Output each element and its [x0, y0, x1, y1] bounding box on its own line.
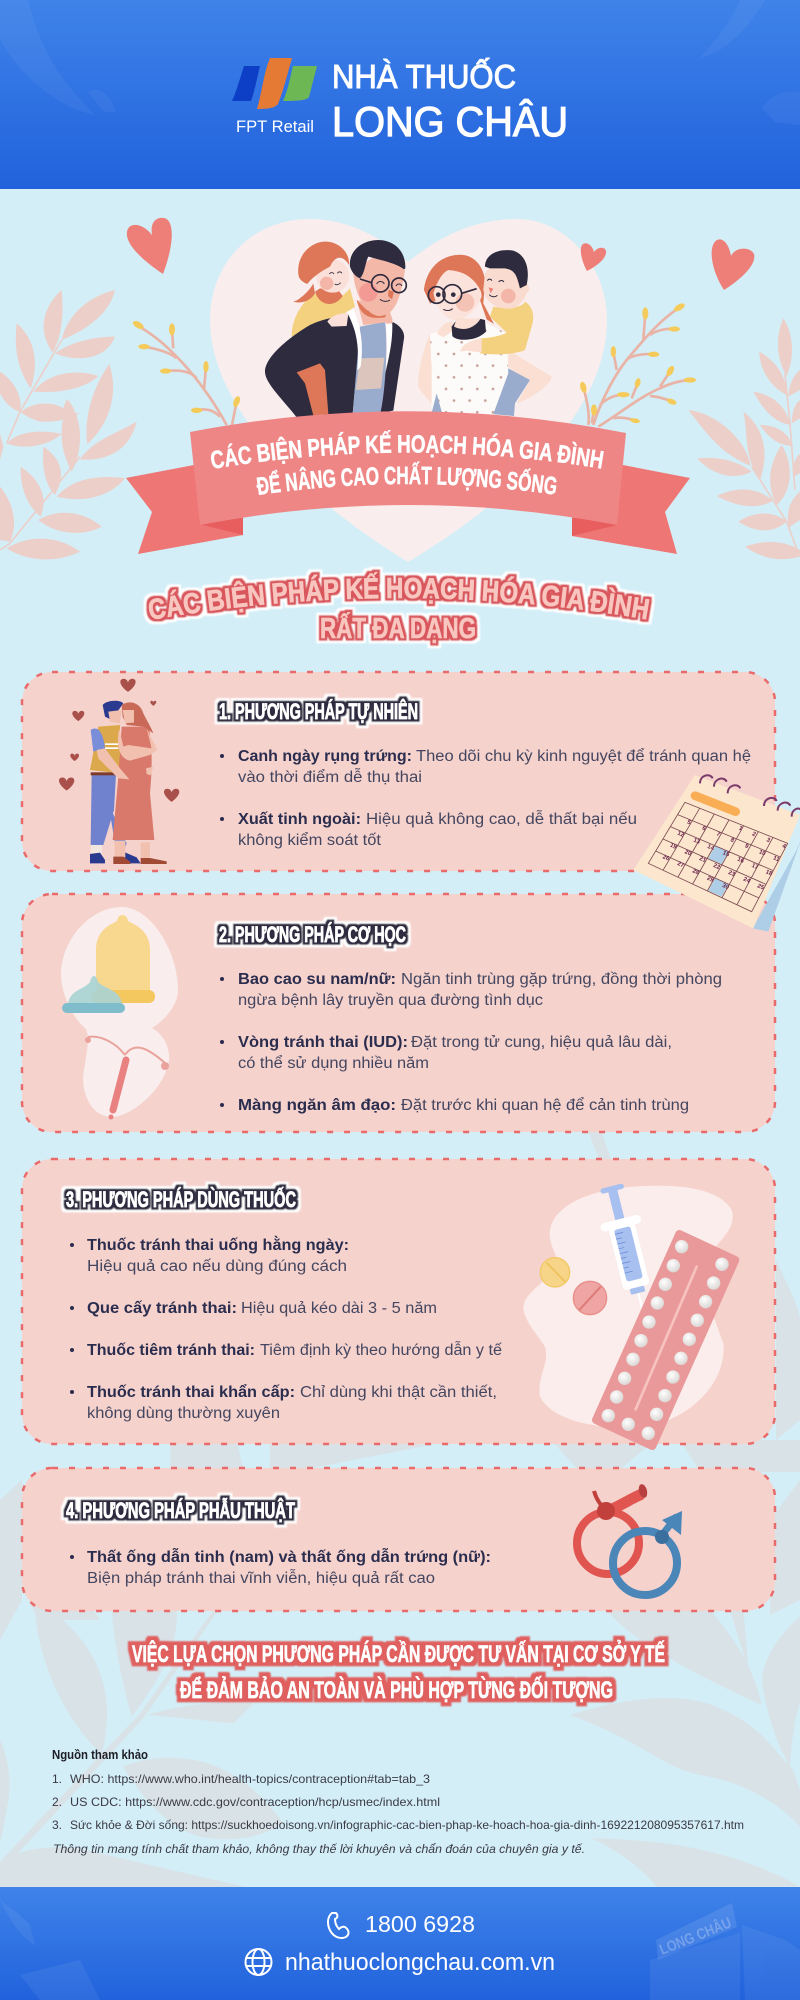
- logo: FPT Retail: [232, 58, 317, 136]
- ribbon text: ĐỂ NÂNG CAO CHẤT LƯỢNG SỐNG: [256, 461, 557, 496]
- illustration: calendar: 27: [676, 861, 685, 869]
- main heading: RẤT ĐA DẠNG: [316, 606, 480, 649]
- brand name: [332, 57, 568, 145]
- references: WHO: https://www.who.int/health-topics/contraception#tab=tab_3: [70, 1772, 430, 1786]
- closing callout: [132, 1639, 665, 1704]
- ribbon tail left: [126, 465, 243, 554]
- main heading: CÁC BIỆN PHÁP KẾ HOẠCH HÓA GIA ĐÌNH: [143, 566, 655, 625]
- illustration: pills and syringe: [523, 1181, 735, 1446]
- mother and boy: [418, 250, 552, 416]
- illustration: calendar: 4: [781, 843, 787, 850]
- illustration: calendar: 26: [661, 854, 671, 863]
- illustration: calendar: 25: [756, 883, 765, 892]
- illustration: calendar: 17: [750, 863, 760, 871]
- icon: IUD: [85, 1037, 169, 1120]
- text: surgical method: Thất ống dẫn tinh (nam) và thất ống dẫn trứng (nữ):: [87, 1549, 491, 1566]
- text: mechanical methods list: [220, 971, 722, 1114]
- text: medication list: Thuốc tránh thai uống hằng ngày:: [87, 1236, 349, 1254]
- icon: syringe: [591, 1181, 665, 1325]
- icon: couple: [59, 679, 179, 864]
- text: mechanical methods list: Vòng tránh thai (IUD):: [238, 1034, 408, 1051]
- references: 2.: [52, 1795, 62, 1809]
- illustration: calendar: 9: [744, 843, 750, 850]
- illustration: calendar: 30: [721, 883, 730, 891]
- main heading: [143, 566, 655, 649]
- heading: section 4: 4. PHƯƠNG PHÁP PHẪU THUẬT: [66, 1497, 295, 1523]
- ribbon tail right: [572, 465, 690, 554]
- ribbon folds: [199, 518, 617, 536]
- text: natural methods list: Theo dõi chu kỳ kinh nguyệt để tránh quan hệ: [416, 748, 751, 765]
- yellow twig right: [579, 302, 696, 427]
- illustration: calendar: 13: [692, 838, 701, 846]
- text: mechanical methods list: Bao cao su nam/nữ:: [238, 971, 396, 988]
- icon: phone: [328, 1913, 349, 1938]
- illustration: calendar: 15: [721, 850, 731, 859]
- yellow twig left: [132, 319, 241, 427]
- heading: section 1: 1. PHƯƠNG PHÁP TỰ NHIÊN: [219, 699, 418, 724]
- text: medication list: Tiêm định kỳ theo hướng dẫn y tế: [260, 1342, 502, 1359]
- text: natural methods list: vào thời điểm dễ thụ thai: [238, 769, 422, 786]
- icon: yellow pill: [540, 1258, 570, 1287]
- text: medication list: Que cấy tránh thai:: [87, 1300, 237, 1317]
- illustration: calendar: 6: [701, 826, 707, 833]
- references: 1.: [52, 1772, 62, 1786]
- text: natural methods list: không kiểm soát tốt: [238, 832, 382, 849]
- icon: small heart: [581, 243, 606, 271]
- illustration: calendar: [633, 775, 800, 932]
- icon: heart right: [712, 239, 754, 290]
- illustration: contraceptive devices: [61, 907, 178, 1120]
- footer band: [0, 1887, 800, 2000]
- illustration: calendar: 21: [698, 856, 707, 864]
- ribbon banner: [126, 411, 690, 554]
- logo: FPT Retail: FPT Retail: [236, 117, 314, 136]
- icon: diaphragm: [62, 976, 125, 1013]
- ribbon text: CÁC BIỆN PHÁP KẾ HOẠCH HÓA GIA ĐÌNH: [210, 430, 604, 469]
- text: surgical method: [70, 1549, 491, 1587]
- text: surgical method: Biện pháp tránh thai vĩnh viễn, hiệu quả rất cao: [87, 1570, 435, 1587]
- panel: mechanical methods: [22, 894, 775, 1132]
- illustration: calendar: 22: [712, 863, 721, 871]
- illustration: calendar: 1: [738, 826, 744, 833]
- icon: red pill: [573, 1281, 607, 1315]
- illustration: calendar: 23: [727, 870, 736, 878]
- text: medication list: Chỉ dùng khi thật cần thiết,: [300, 1384, 497, 1401]
- heading: section 2: 2. PHƯƠNG PHÁP CƠ HỌC: [219, 922, 406, 947]
- illustration: calendar: 16: [736, 857, 745, 865]
- text: mechanical methods list: Màng ngăn âm đạo:: [238, 1097, 396, 1114]
- footer decoration: storefront: [0, 1900, 800, 2000]
- leaf branch right: [688, 318, 800, 559]
- text: mechanical methods list: Đặt trước khi quan hệ để cản tinh trùng: [401, 1097, 689, 1114]
- text: natural methods list: [220, 748, 751, 849]
- illustration: calendar: 12: [676, 831, 685, 839]
- brand name: NHÀ THUỐC: [332, 57, 516, 95]
- illustration: calendar: 3: [765, 837, 771, 844]
- illustration: calendar: 2: [751, 831, 757, 838]
- text: medication list: [70, 1236, 502, 1422]
- illustration: calendar: 11: [772, 855, 781, 864]
- illustration: calendar: 29: [706, 876, 715, 884]
- text: mechanical methods list: Đặt trong tử cung, hiệu quả lâu dài,: [411, 1034, 672, 1051]
- girl: [292, 242, 355, 337]
- header decoration: [0, 0, 800, 125]
- text: natural methods list: Xuất tinh ngoài:: [238, 811, 361, 828]
- text: mechanical methods list: có thể sử dụng nhiều năm: [238, 1055, 429, 1072]
- references: [52, 1748, 744, 1856]
- big pale heart: [210, 219, 607, 562]
- icon: tied gender rings: [577, 1483, 682, 1595]
- ribbon text: [210, 430, 604, 496]
- text: natural methods list: Canh ngày rụng trứng:: [238, 748, 412, 765]
- icon: heart left: [127, 218, 172, 274]
- text: mechanical methods list: Ngăn tinh trùng gặp trứng, đồng thời phòng: [401, 971, 722, 988]
- background grey leaves: [0, 1128, 800, 1887]
- footer decoration: storefront: LONG CHÂU: [657, 1914, 734, 1959]
- references: Thông tin mang tính chất tham khảo, không thay thế lời khuyên và chẩn đoán của chuyên gia y tế.: [53, 1842, 585, 1856]
- illustration: calendar: 5: [686, 820, 692, 827]
- father: [265, 240, 406, 417]
- icon: condom: [92, 915, 155, 1003]
- illustration: calendar: 8: [729, 837, 735, 844]
- references: Sức khỏe & Đời sống: https://suckhoedoisong.vn/infographic-cac-bien-phap-ke-hoach-hoa-gia-dinh-169221208095357617.htm: [70, 1818, 744, 1832]
- family illustration: [265, 240, 552, 417]
- panel: surgical methods: [22, 1468, 775, 1611]
- panel: medication methods: [22, 1159, 775, 1446]
- phone number: 1800 6928: [365, 1911, 475, 1937]
- illustration: calendar: 14: [706, 844, 715, 852]
- references: 3.: [52, 1818, 62, 1832]
- panel: natural methods: [22, 672, 775, 871]
- text: medication list: không dùng thường xuyên: [87, 1405, 280, 1422]
- illustration: calendar: 18: [764, 869, 774, 878]
- header band: [0, 0, 800, 189]
- illustration: calendar: 7: [715, 831, 721, 838]
- text: medication list: Thuốc tiêm tránh thai:: [87, 1342, 255, 1359]
- ribbon centre: [190, 411, 626, 525]
- text: medication list: Hiệu quả cao nếu dùng đúng cách: [87, 1258, 347, 1275]
- illustration: calendar: 10: [758, 849, 767, 858]
- text: mechanical methods list: ngừa bệnh lây truyền qua đường tình dục: [238, 992, 543, 1009]
- references: Nguồn tham khảo: [52, 1748, 148, 1762]
- brand name: LONG CHÂU: [332, 98, 568, 145]
- icon: globe: [246, 1949, 272, 1975]
- illustration: calendar: 20: [683, 849, 693, 858]
- icon: blister pack: [596, 1234, 735, 1446]
- heading: section 3: 3. PHƯƠNG PHÁP DÙNG THUỐC: [66, 1186, 296, 1212]
- text: medication list: Thuốc tránh thai khẩn cấp:: [87, 1384, 295, 1401]
- website: nhathuoclongchau.com.vn: [285, 1949, 555, 1976]
- references: US CDC: https://www.cdc.gov/contraception/hcp/usmec/index.html: [70, 1795, 440, 1809]
- leaf branch left: [0, 290, 137, 559]
- illustration: calendar: 24: [742, 877, 751, 885]
- text: natural methods list: Hiệu quả không cao, dễ thất bại nếu: [366, 811, 637, 828]
- illustration: calendar: 28: [691, 868, 700, 877]
- illustration: calendar: 19: [669, 843, 678, 851]
- text: medication list: Hiệu quả kéo dài 3 - 5 năm: [241, 1300, 437, 1317]
